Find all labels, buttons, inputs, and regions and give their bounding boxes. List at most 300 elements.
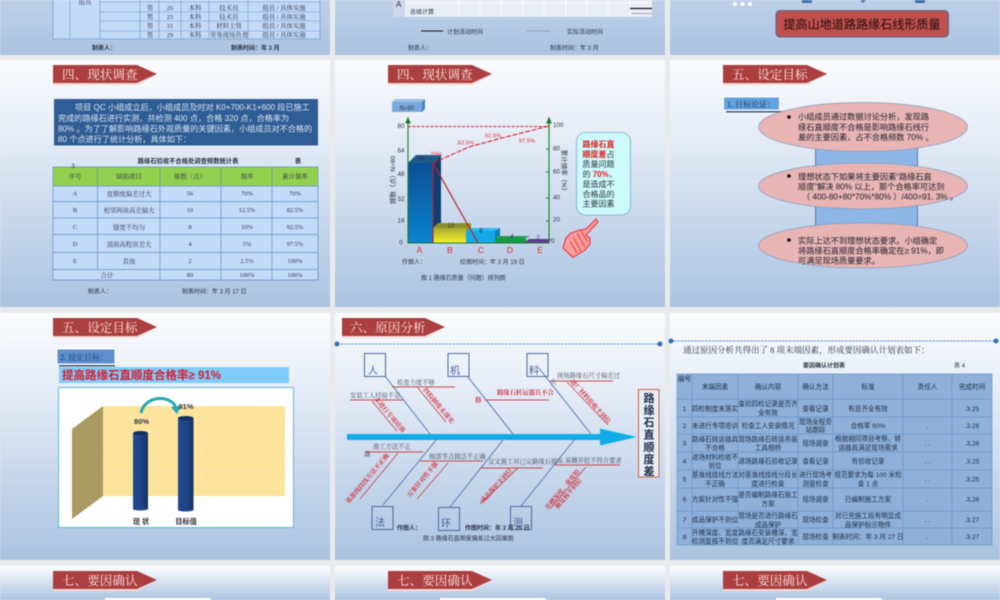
- heading: 七、要因确认: [62, 574, 138, 588]
- argument ellipse 3: 可满足现场质量要求。: [798, 256, 880, 266]
- survey frequency table: 92.5%: [287, 224, 304, 231]
- heading: [53, 318, 157, 338]
- bar E: [526, 239, 552, 244]
- heading: [388, 571, 492, 591]
- survey frequency table: 12.5%: [239, 207, 256, 214]
- confirmation plan table: 1: [683, 406, 687, 413]
- confirmation plan table: 路缘石安装槽深、宽: [738, 528, 798, 537]
- bar names: [133, 517, 197, 526]
- effect box: 差: [644, 464, 654, 478]
- confirmation plan table: .3.25: [965, 458, 980, 466]
- dashed divider: [668, 338, 998, 344]
- arrow: improvement arc: [141, 398, 181, 414]
- survey frequency table: 80: [187, 272, 193, 279]
- slide: pareto chart: [335, 60, 665, 307]
- bar values: 10: [447, 222, 455, 230]
- confirmation plan table: 有且齐全有效: [848, 404, 888, 413]
- topic box: [776, 10, 948, 37]
- fishbone footer: 作图时间：年 3 月 25 日: [465, 524, 530, 532]
- team member table: 技术员: [219, 12, 239, 21]
- table title: [803, 362, 966, 370]
- confirmation plan table: .: [927, 496, 929, 504]
- cause branch text: 格: [475, 395, 482, 404]
- category labels: [368, 364, 539, 530]
- survey frequency table: 相邻两块高差偏大: [103, 206, 155, 214]
- heading: [388, 65, 492, 85]
- confirmation plan table: 7: [683, 517, 687, 524]
- survey frequency table: 4: [188, 241, 192, 248]
- confirmation plan table: 现场全程旁: [799, 417, 832, 426]
- confirmation plan table: 3: [683, 440, 687, 448]
- confirmation plan table: 末端因素: [702, 382, 729, 391]
- chart walls: [72, 406, 285, 519]
- section tag: 2. 设定目标：: [60, 352, 108, 362]
- heading: [53, 65, 157, 85]
- survey frequency table: 频率: [241, 172, 254, 180]
- argument ellipse 1: 小组成员通过数据讨论分析，发现路: [798, 112, 929, 122]
- confirmation plan table: 4: [683, 458, 687, 466]
- gantt chart: [393, 0, 652, 17]
- confirmation plan table: 查看记录: [802, 456, 829, 466]
- confirmation plan table: 根据相同项目考察，转: [835, 434, 901, 443]
- slide: target justification: [670, 60, 1000, 307]
- argument ellipse 3: [758, 223, 968, 268]
- survey description: 80% 。为了了解影响路缘石外观质量的关键因素，小组成员对不合格的: [58, 124, 312, 134]
- confirmation plan table: 确认方法: [802, 382, 829, 391]
- survey frequency table: 70%: [241, 190, 254, 198]
- argument ellipse 1: 差的主要因素，占不合格频数 70% 。: [798, 132, 934, 142]
- confirmation plan table: [677, 374, 992, 546]
- category labels: 环: [441, 519, 451, 530]
- heading: 七、要因确认: [732, 574, 808, 588]
- survey frequency table: 顶面高程误差大: [107, 240, 152, 248]
- confirmation plan table: 成品保护不到位: [692, 515, 738, 524]
- category labels: [417, 245, 543, 255]
- team member table: 男: [147, 12, 153, 21]
- table footer: 制表人：: [92, 44, 116, 52]
- cause branch text: 大: [550, 377, 557, 386]
- target bar: [178, 416, 194, 512]
- cause branch text: 检查力度不够: [397, 378, 435, 386]
- confirmation plan table: 标准: [861, 382, 875, 391]
- category labels: E: [537, 245, 543, 255]
- survey frequency table: 2: [188, 258, 192, 265]
- confirmation plan table: 5: [683, 476, 687, 484]
- right axis labels: 60: [553, 168, 561, 176]
- callout: 路缘石直: [582, 139, 614, 149]
- heading: [53, 571, 157, 591]
- cause branch text: 路缘石转运器具不合: [497, 388, 554, 396]
- team member table: [53, 0, 320, 39]
- survey table footer: 制表人：: [88, 288, 112, 296]
- bar D: [495, 236, 530, 243]
- slide: key cause confirmation 3: [670, 566, 1000, 600]
- gantt legend: 实际活动时间: [567, 28, 603, 36]
- diagonal root causes: 方案针对性不强: [404, 459, 440, 499]
- confirmation plan table: . .: [925, 458, 930, 466]
- confirmation plan table: 运器具满足现场需求: [838, 443, 898, 452]
- heading: 七、要因确认: [397, 574, 473, 588]
- confirmation plan table: 路缘石转运器具: [692, 434, 738, 444]
- cause branch lines: [350, 381, 620, 509]
- table footer: 制表时间：年 3 月: [231, 44, 280, 52]
- category labels: 料: [529, 364, 539, 377]
- category labels: 机: [450, 364, 460, 377]
- confirmation plan table: 方案针对性不强: [692, 494, 738, 504]
- fishbone footer: 作图人：: [397, 524, 421, 532]
- team member table: 男: [147, 21, 153, 30]
- confirmation plan table: 进场路缘石验收记录: [738, 456, 798, 466]
- team member table: 男: [147, 30, 153, 39]
- team member table: 劳务现场负责: [210, 30, 249, 39]
- axis titles: [388, 150, 569, 204]
- survey frequency table: 直顺度偏差过大: [107, 189, 152, 198]
- confirmation plan table: 制表时间：年 3 月 27 日: [832, 532, 904, 541]
- confirmation plan table: 检测复核不到位: [692, 536, 738, 546]
- confirmation plan table: 8: [683, 534, 687, 541]
- category labels: 测: [513, 516, 523, 529]
- survey table footer: [88, 288, 247, 296]
- left axis labels: 48: [397, 171, 405, 178]
- table title: 表 4: [954, 362, 966, 370]
- team member table: 技术员: [219, 3, 239, 12]
- confirmation plan table: .3.26: [965, 423, 980, 430]
- callout: [576, 132, 630, 215]
- slide: key cause confirmation 2: [335, 566, 665, 600]
- confirmation plan table: 到位: [708, 461, 722, 470]
- confirmation plan table: 品保护标示物件: [845, 520, 891, 529]
- callout: 是造成不: [582, 179, 614, 189]
- survey frequency table: 缺陷项目: [116, 172, 142, 180]
- effect box: 顺: [644, 441, 654, 454]
- cause branch text: 施工方法不正: [373, 442, 411, 450]
- survey frequency table: 82.5%: [287, 207, 304, 214]
- category labels: D: [507, 245, 513, 255]
- survey frequency table: A: [73, 190, 78, 198]
- cause branch text: 现场路缘石尺寸偏差过: [557, 370, 621, 380]
- survey frequency table: 70%: [289, 190, 302, 198]
- confirmation plan table: 对基准线挂线分段长: [738, 470, 798, 479]
- confirmation plan table: 2: [683, 423, 687, 430]
- confirmation plan table: 确认内容: [755, 382, 782, 391]
- confirmation plan table: 完成时间: [959, 382, 986, 391]
- axis titles: 累计频率（%）: [560, 150, 569, 194]
- cumulative labels: [430, 134, 535, 158]
- right axis labels: 100: [553, 122, 564, 129]
- gantt legend: 计划活动时间: [447, 28, 483, 36]
- ellipsis dots: [733, 2, 752, 6]
- team member table: 组员 / 具体实施: [262, 30, 306, 39]
- category labels: 人: [368, 365, 378, 377]
- confirmation plan table: 现场检查: [802, 532, 829, 541]
- survey frequency table: C: [73, 224, 77, 231]
- argument ellipse 1: [758, 102, 968, 152]
- category labels: C: [478, 245, 484, 255]
- survey frequency table: 2.5%: [240, 258, 254, 265]
- argument ellipse 1: 缘石直顺度不合格是影响路缘石线行: [798, 122, 929, 132]
- current bar: [133, 431, 148, 510]
- survey frequency table: 56: [187, 190, 193, 198]
- confirmation plan table: . .: [925, 517, 930, 524]
- argument ellipse 3: 实际上达不到理想状态要求。小组确定: [798, 236, 937, 246]
- confirmation plan table: 已编制施工方案: [845, 494, 891, 504]
- heading: 四、现状调查: [62, 67, 138, 82]
- slide: key cause confirmation 1: [0, 566, 330, 600]
- team member table: 男: [147, 3, 153, 12]
- gantt chart: A: [396, 0, 402, 9]
- diagonal root causes: 开槽深度、宽度检: [542, 467, 582, 512]
- category labels: B: [447, 245, 453, 255]
- left axis labels: 0: [399, 240, 403, 246]
- survey description: [54, 99, 318, 146]
- heading: 五、设定目标: [62, 320, 138, 335]
- survey description: 项目 QC 小组成立后，小组成员及时对 K0+700-K1+600 段已施工: [75, 102, 310, 112]
- gantt chart: 总结计算: [410, 8, 434, 16]
- team member table: 本科: [189, 12, 202, 21]
- confirmation plan table: 编号: [678, 374, 691, 383]
- sample size tag: [392, 99, 425, 112]
- callout: 质量问题: [582, 159, 614, 169]
- topic box: 提高山地道路路缘石线形质量: [783, 16, 941, 32]
- team member table: 29: [167, 32, 173, 39]
- confirmation plan table: 度否满足尺寸要求: [742, 536, 795, 546]
- left axis labels: 80: [397, 123, 405, 130]
- callout: 顺度差占: [582, 149, 614, 159]
- bar value labels: [134, 402, 194, 426]
- survey frequency table: 序号: [69, 172, 82, 180]
- heading: [723, 65, 827, 85]
- confirmation plan table: 查验四检记录是否齐: [738, 399, 798, 408]
- callout: 的 70%，: [582, 169, 617, 179]
- effect box: 度: [644, 452, 654, 466]
- confirmation plan table: . .: [925, 476, 930, 484]
- survey frequency table: 3: [71, 164, 75, 170]
- confirmation plan table: .3.27: [965, 517, 980, 524]
- effect box: 直: [644, 428, 654, 442]
- schedule footer: 制表时间：年 3 月: [550, 44, 599, 52]
- slide: target chart: [0, 313, 330, 560]
- team member table: 31: [167, 23, 173, 30]
- confirmation plan table: 现场检查: [802, 515, 829, 524]
- chart footer: 绘图时间：年 3 月 19 日: [460, 258, 525, 266]
- diagonal root causes: 成品保护不到位: [478, 465, 515, 505]
- bar value labels: 91%: [178, 402, 194, 411]
- cause branch text: 安装工人经验不足: [350, 390, 401, 400]
- content box top: [440, 598, 546, 600]
- confirmation plan table: 是否编制路缘石施工: [738, 490, 798, 499]
- survey frequency table: 10%: [241, 224, 254, 231]
- bar values: [417, 156, 540, 242]
- team member table: 本科: [189, 30, 202, 39]
- team member table: 组员 / 具体实施: [262, 21, 306, 30]
- axis titles: 频数（点）N=80: [388, 156, 397, 204]
- bar values: 56: [417, 156, 425, 162]
- cause branch text: 细部节点做法不正确: [429, 452, 486, 460]
- confirmation plan table: 全有效: [758, 408, 778, 417]
- slide: status survey text and table: [0, 60, 330, 307]
- down arrows: [802, 0, 925, 3]
- cumulative line: [408, 126, 549, 243]
- right axis labels: 0: [551, 238, 555, 245]
- confirmation plan table: 基准线挂线方法: [692, 470, 738, 479]
- fishbone caption: 图 3 路缘石直顺度偏差过大因果图: [423, 534, 514, 542]
- survey frequency table: 100%: [288, 258, 303, 265]
- table title: 要因确认计划表: [803, 362, 845, 370]
- survey frequency table: [53, 164, 318, 280]
- chart caption: 图 1 路缘石质量（问题）排列图: [421, 274, 506, 282]
- argument ellipse 2: （ 400-80+80*70%*80% ）/400=91. 3% 。: [802, 192, 958, 202]
- confirmation plan table: 进场材料检收不: [692, 452, 738, 462]
- confirmation plan table: .3.25: [965, 476, 980, 484]
- schedule footer: 制表人：: [408, 44, 432, 52]
- bar B: [433, 223, 471, 243]
- dashed divider: [334, 342, 662, 346]
- category labels: 法: [375, 516, 385, 529]
- confirmation plan table: .3.26: [965, 496, 980, 504]
- confirmation plan table: .3.27: [965, 534, 980, 541]
- right axis labels: 20: [553, 216, 561, 224]
- confirmation plan table: 现场调查: [802, 494, 829, 504]
- survey frequency table: E: [73, 258, 77, 265]
- survey frequency table: 10: [187, 207, 193, 214]
- confirmation plan table: .: [927, 534, 929, 541]
- team member table: 25: [167, 14, 173, 21]
- bar C: [466, 228, 500, 243]
- survey frequency table: 5%: [243, 241, 252, 248]
- schedule footer: [408, 44, 599, 52]
- confirmation plan table: 开槽深度、宽度: [692, 528, 738, 537]
- cumulative labels: 92.5%: [485, 134, 501, 140]
- confirmation plan table: .: [927, 423, 929, 430]
- survey frequency table: 8: [188, 224, 192, 231]
- diagonal root causes: 四检制度未落实: [421, 386, 457, 426]
- left axis labels: 32: [397, 196, 405, 203]
- confirmation plan table: 责任人: [918, 382, 938, 391]
- chart footer: 作图人：: [402, 258, 426, 266]
- confirmation plan table: 现场调查: [802, 438, 829, 448]
- effect box: 路: [644, 391, 654, 405]
- survey description: 80 个点进行了统计分析，具体如下：: [58, 134, 191, 144]
- fishbone footer: [397, 524, 530, 532]
- survey frequency table: B: [73, 207, 77, 214]
- left axis labels: [397, 123, 405, 246]
- target statement: [59, 367, 289, 383]
- cause bones: [383, 367, 591, 507]
- argument ellipse 2: [758, 163, 968, 209]
- left axis labels: 16: [397, 218, 405, 224]
- chart footer: [402, 258, 525, 266]
- heading: [342, 318, 445, 338]
- bar values: 8: [479, 228, 483, 234]
- effect box: [638, 390, 659, 478]
- table footer: [92, 44, 280, 52]
- section tag: [724, 97, 782, 112]
- team member table: 材料主管: [216, 21, 242, 30]
- argument ellipse 2: 顺度”解决 80% 以上，那个合格率可达到: [798, 182, 944, 192]
- cause branch text: 基槽开挖不符合要求: [565, 456, 622, 464]
- table title: 路缘石验收不合格处调查频数统计表: [138, 156, 239, 165]
- confirmation plan table: 未进行专项培训: [692, 421, 738, 430]
- icon: pointing hand: [563, 219, 598, 258]
- confirmation plan table: .3.25: [965, 406, 980, 413]
- confirmation plan table: . .: [925, 440, 930, 448]
- confirmation plan table: 有验收记录: [852, 456, 885, 466]
- confirmation plan table: 现场是否进行路缘石: [738, 511, 798, 520]
- team member table: 组员 / 具体实施: [262, 12, 306, 21]
- argument ellipse 3: 将路缘石直顺度合格率确定在≥ 91%，即: [798, 246, 944, 256]
- target statement: 提高路缘石直顺度合格率≥ 91%: [62, 368, 221, 382]
- connector panel: [816, 147, 918, 227]
- survey frequency table: D: [73, 241, 78, 248]
- target bar chart: [58, 388, 294, 528]
- right axis labels: 40: [553, 194, 561, 202]
- cause branch text: 确: [364, 449, 371, 458]
- confirmation plan table: 不正确: [705, 479, 725, 488]
- confirmation plan table: 6: [683, 496, 687, 504]
- argument ellipse 2: 理想状态下如果将主要因素“路缘石直: [798, 172, 932, 182]
- cumulative labels: 97.5%: [519, 138, 535, 144]
- effect box: 石: [644, 416, 654, 429]
- survey frequency table: 缝宽不均匀: [113, 222, 145, 232]
- content box top: [105, 598, 211, 600]
- confirmation plan table: 工具相桥: [755, 443, 782, 452]
- callout: 合格品的: [582, 189, 614, 199]
- section tag: 1. 目标论证：: [727, 99, 775, 109]
- team member table: 本科: [189, 3, 202, 12]
- diagonal root causes: 进厂材料验收不到位: [569, 377, 614, 426]
- confirmation plan table: 合格率 60%: [851, 421, 886, 430]
- cause branch text: [350, 370, 622, 466]
- slide: topic selection fragment: [670, 0, 1000, 55]
- confirmation plan table: 方案: [761, 499, 775, 508]
- arrow: main spine: [347, 428, 637, 446]
- cumulative labels: 82.5%: [458, 140, 474, 146]
- sample size tag: N=80: [400, 106, 415, 112]
- bar values: 4: [510, 234, 514, 240]
- team member table: 组员 / 具体实施: [262, 3, 306, 12]
- left axis labels: 64: [397, 148, 405, 154]
- section tag: [57, 349, 115, 366]
- confirmation plan table: 站跟踪: [806, 425, 826, 434]
- heading: 四、现状调查: [397, 67, 473, 82]
- slide: team table fragment: [0, 0, 330, 55]
- survey frequency table: 其他: [123, 256, 136, 266]
- bar names: 现 状: [133, 517, 150, 526]
- table title: [138, 156, 302, 165]
- axes: [406, 118, 551, 243]
- intro sentence: 通过原因分析共得出了 8 项末端因素，形成要因确认计划表如下：: [683, 345, 930, 356]
- survey frequency table: 97.5%: [287, 241, 304, 248]
- heading: [723, 571, 827, 591]
- diagonal root causes: 基准线挂线方法不正确: [343, 451, 391, 505]
- survey frequency table: 频数（点）: [174, 172, 206, 180]
- diagonal root causes: 未进行专项培训: [372, 395, 408, 434]
- diagonal root causes: [343, 377, 614, 512]
- diagonal root causes: 测复核不到位: [552, 475, 584, 511]
- effect box: 缘: [644, 403, 654, 417]
- survey description: 完成的路缘石进行实测，共检测 400 点，合格 320 点，合格率为: [58, 113, 289, 123]
- callout: 主要因素: [582, 198, 614, 208]
- bar values: 2: [536, 234, 540, 242]
- team member table: 26: [167, 5, 173, 12]
- right axis labels: 80: [553, 146, 561, 152]
- confirmation plan table: 查 1 点: [858, 479, 879, 488]
- bar value labels: 80%: [134, 417, 149, 426]
- category labels: A: [417, 245, 423, 255]
- confirmation plan table: 测量检查: [802, 479, 829, 488]
- confirmation plan table: 规范要求为每 100 米检: [834, 470, 902, 479]
- slide: cause analysis fishbone: [334, 313, 665, 560]
